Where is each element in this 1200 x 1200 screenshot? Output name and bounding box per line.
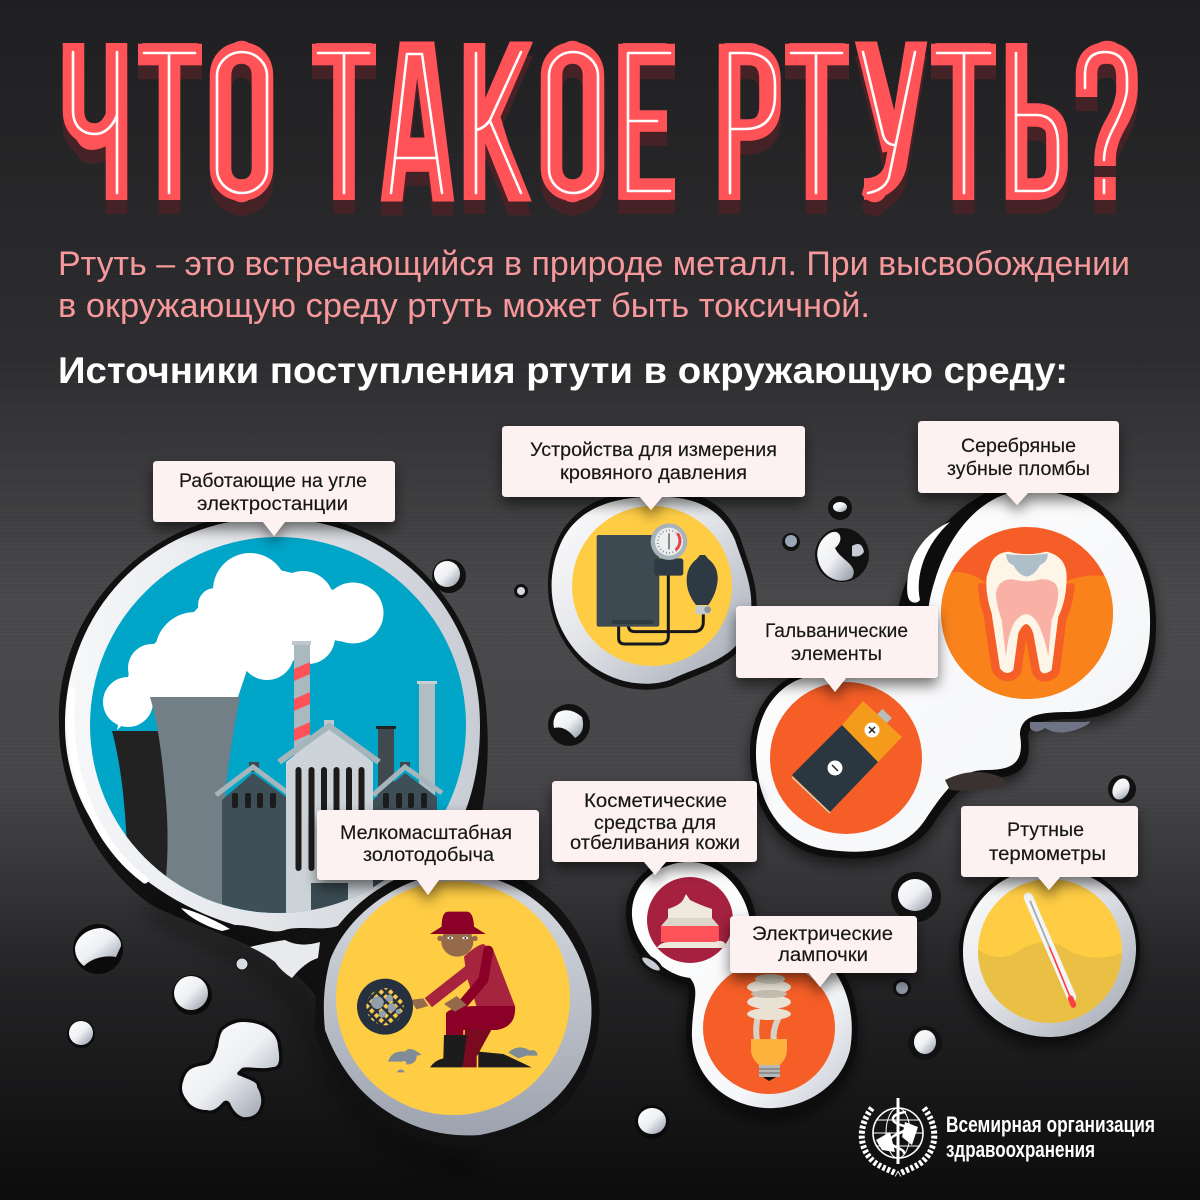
title: О	[211, 0, 272, 249]
title: А	[384, 0, 451, 249]
intro text	[58, 245, 1130, 325]
callout: light bulbs	[730, 916, 917, 987]
callout: skin whitening cosmetics: Косметические	[584, 791, 727, 812]
callout: silver dental fillings	[918, 421, 1119, 505]
icon: tooth with filling	[941, 527, 1113, 699]
organization name: здравоохранения	[946, 1137, 1095, 1162]
title: Т	[140, 0, 200, 249]
callout: coal power stations: электростанции	[197, 494, 348, 515]
callout: skin whitening cosmetics: отбеливания кожи	[570, 833, 740, 854]
icon: WHO emblem	[862, 1098, 934, 1174]
panel: gold mining drop	[181, 864, 599, 1145]
logo: World Health Organization	[862, 1098, 1155, 1174]
callout: light bulbs: Электрические	[752, 924, 893, 945]
panel: thermometer drop	[959, 864, 1140, 1041]
callout: galvanic cells: Гальванические	[765, 621, 908, 642]
callout: blood pressure devices	[502, 426, 805, 510]
heading: Источники поступления ртути в окружающую среду:	[58, 350, 1068, 391]
callout: small-scale gold mining	[317, 810, 539, 895]
icon: sky and factory	[90, 537, 466, 913]
callout: thermometers: термометры	[989, 844, 1106, 865]
title: Т	[314, 0, 374, 249]
droplets	[67, 496, 1136, 1139]
callout: silver dental fillings: зубные пломбы	[947, 459, 1090, 480]
callout: coal power stations: Работающие на угле	[179, 471, 367, 492]
callout: blood pressure devices: Устройства для измерения	[530, 440, 777, 461]
cloud	[103, 553, 384, 730]
panel: blood pressure drop	[548, 491, 757, 690]
title: К	[464, 0, 527, 249]
callout: light bulbs: лампочки	[778, 945, 868, 966]
title: О	[542, 0, 603, 249]
title: Ь	[1003, 0, 1065, 249]
icon: blood pressure monitor	[572, 506, 732, 666]
title: Т	[787, 0, 847, 249]
title: Е	[616, 0, 672, 249]
title: У	[857, 0, 927, 249]
icon: battery	[770, 682, 922, 834]
intro text: Ртуть – это встречающийся в природе металл. При высвобождении	[58, 245, 1130, 283]
intro text: в окружающую среду ртуть может быть токсичной.	[58, 287, 870, 325]
callout: coal power stations	[153, 461, 395, 536]
callout: small-scale gold mining: Мелкомасштабная	[340, 823, 512, 844]
icon: cream jar	[647, 877, 733, 963]
title: Т	[933, 0, 993, 249]
callout: blood pressure devices: кровяного давления	[560, 463, 747, 484]
callout: galvanic cells: элементы	[791, 644, 882, 665]
callout: thermometers	[961, 806, 1138, 890]
title: Ч	[64, 0, 128, 249]
icon: light bulb	[703, 962, 835, 1094]
icon: gold miner	[336, 881, 570, 1115]
panel: coal power station drop	[58, 522, 488, 996]
callout: galvanic cells	[736, 606, 938, 692]
callout: silver dental fillings: Серебряные	[961, 436, 1076, 457]
title: Р	[717, 0, 778, 249]
callout: skin whitening cosmetics: средства для	[594, 813, 716, 834]
organization name	[946, 1112, 1155, 1162]
callout: skin whitening cosmetics	[552, 781, 757, 875]
panel: tooth and battery drop	[750, 483, 1156, 859]
callout: thermometers: Ртутные	[1007, 820, 1084, 841]
title	[62, 40, 1138, 216]
icon: thermometer	[975, 879, 1125, 1030]
panel: cosmetics and bulb drop	[626, 856, 858, 1114]
callout: small-scale gold mining: золотодобыча	[363, 845, 494, 866]
